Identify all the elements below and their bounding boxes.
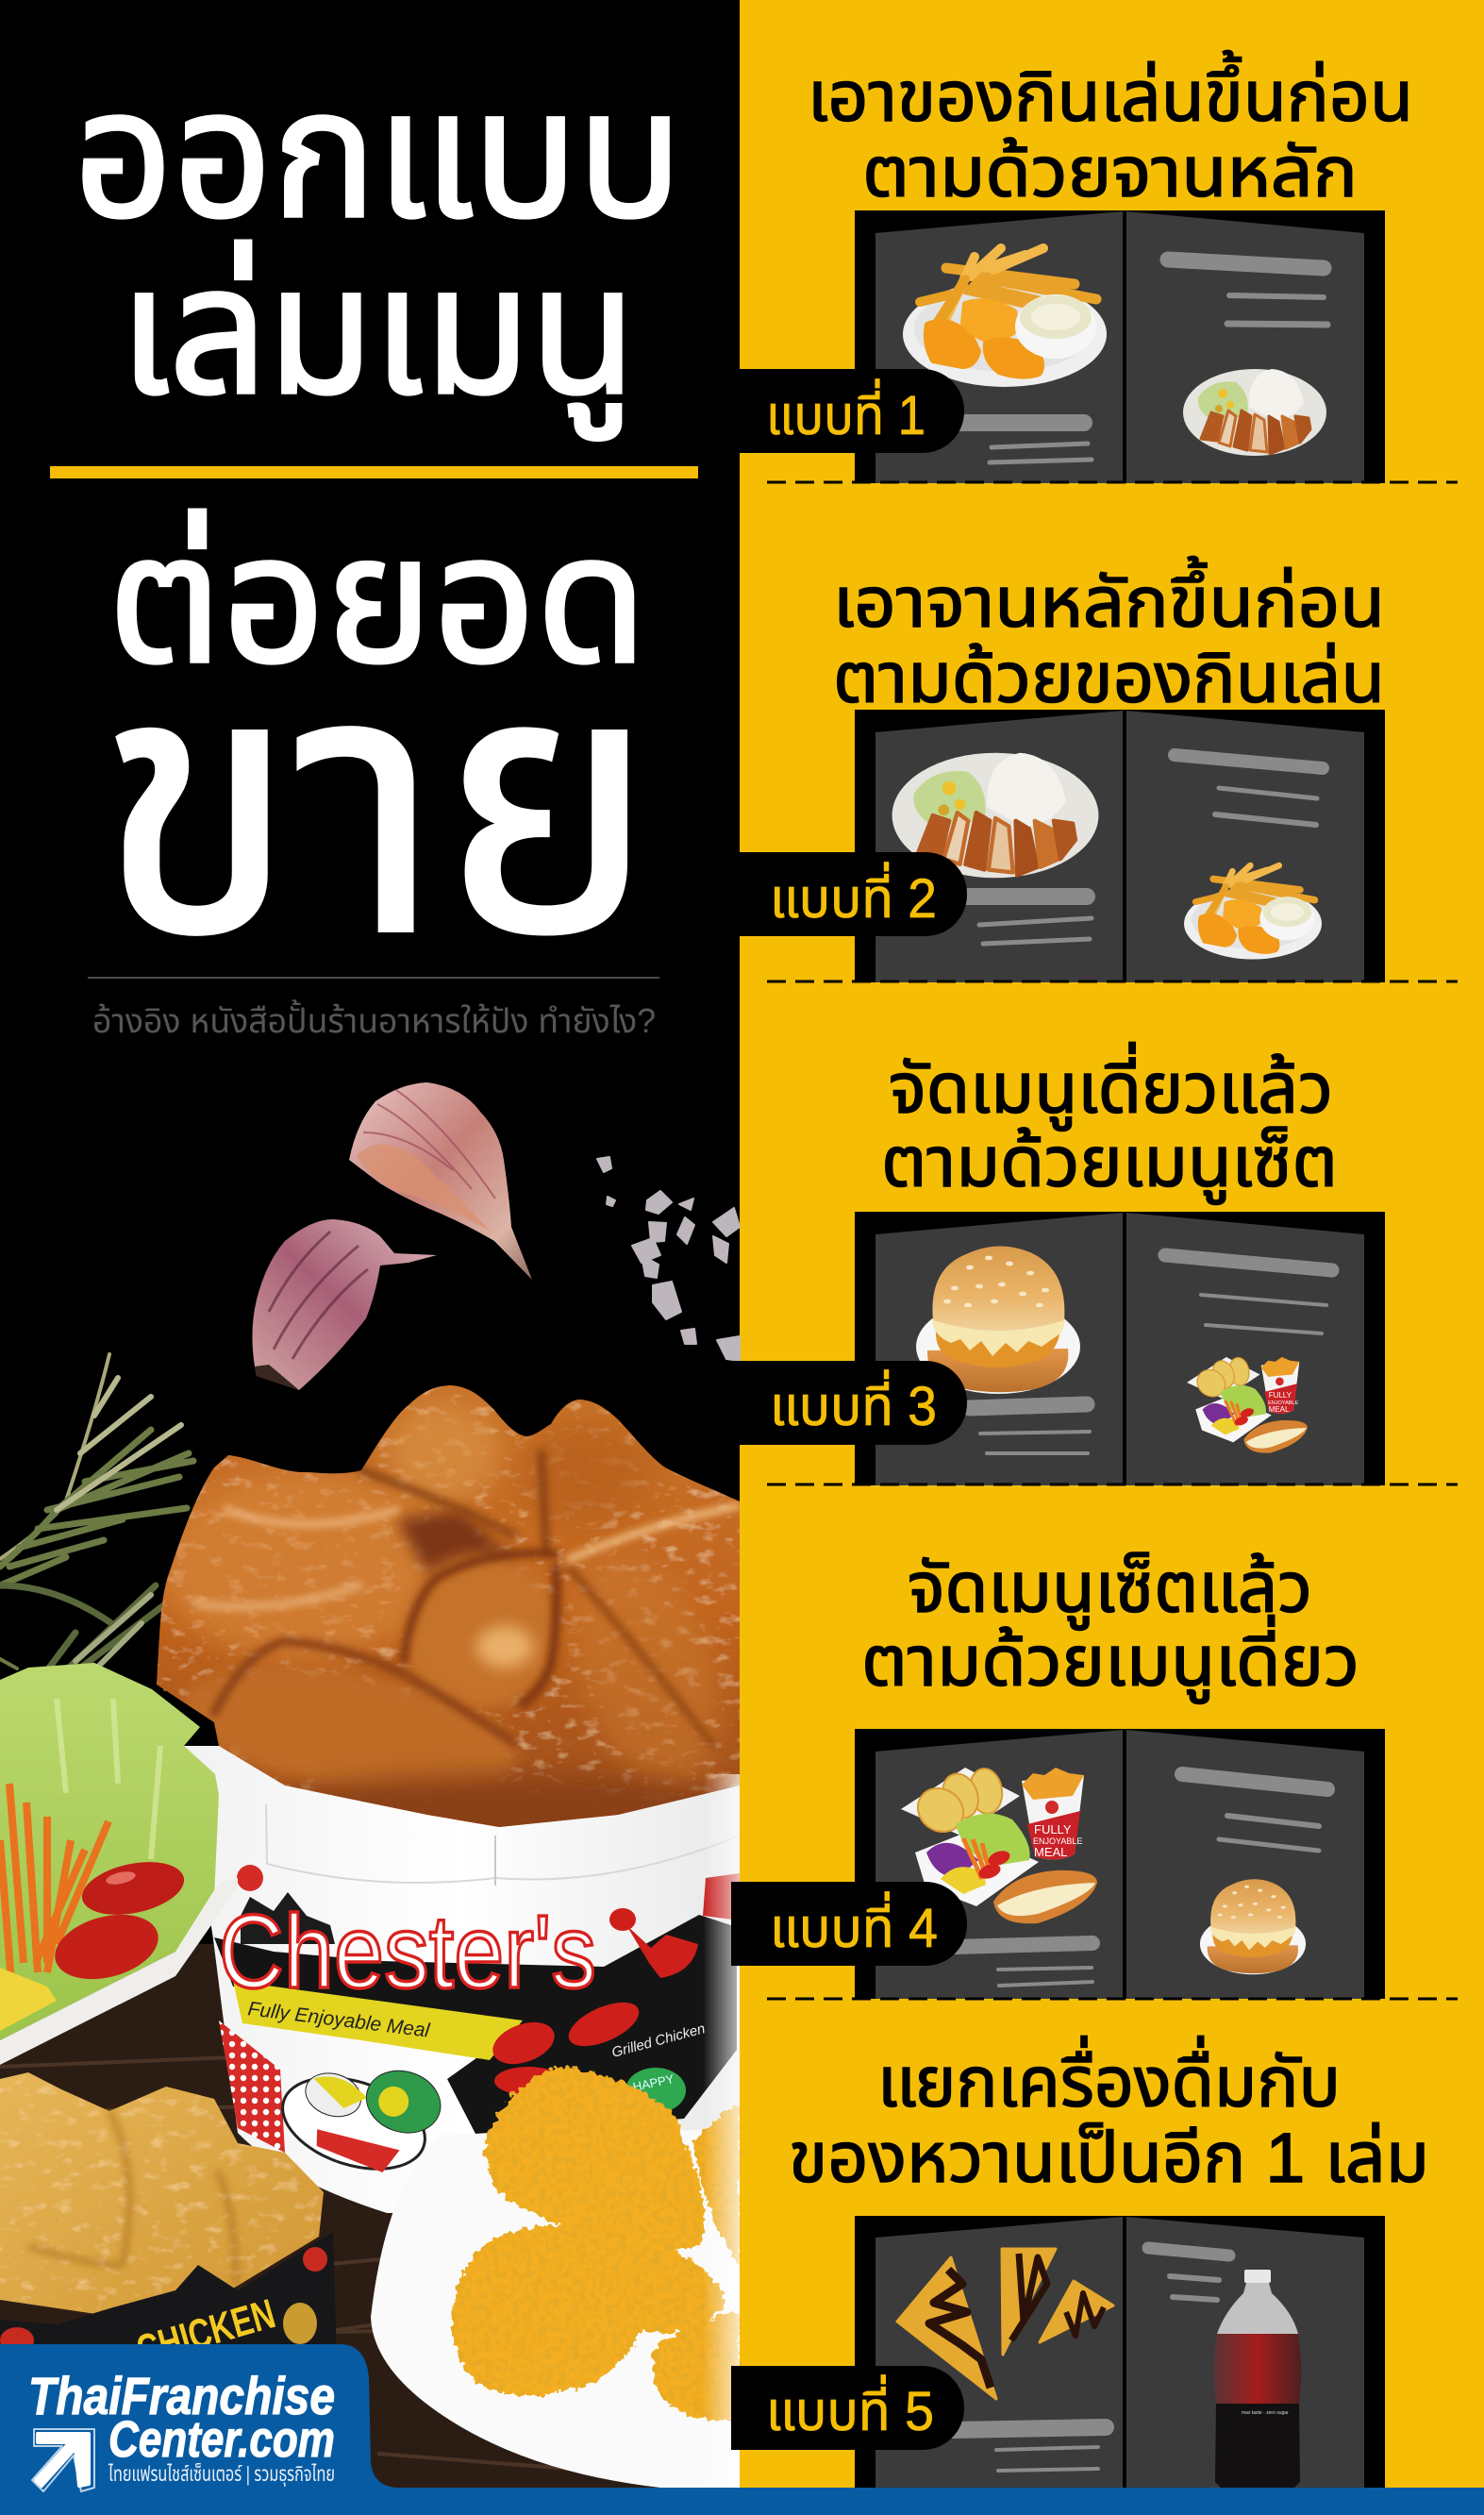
heading: layout 4: ตามด้วยเมนูเดี่ยว xyxy=(861,1615,1359,1703)
menu book: layout 3 xyxy=(855,1212,1385,1485)
dashed separator 1 xyxy=(767,481,1458,483)
heading: layout 1 xyxy=(808,50,1413,211)
menu book: layout 5 xyxy=(855,2216,1385,2488)
food: grilled chicken rice plate xyxy=(892,753,1098,878)
panel: layout 5 xyxy=(731,2036,1429,2488)
menu book: layout 1 xyxy=(855,210,1385,483)
source note: อ้างอิง หนังสือปั้นร้านอาหารให้ปัง ทำยังไง? xyxy=(92,998,656,1040)
logo wordmark second line: Center.com xyxy=(108,2411,335,2468)
panel: layout 2 xyxy=(731,556,1385,982)
food: cheese burger xyxy=(916,1246,1080,1394)
heading: layout 3 xyxy=(881,1042,1338,1204)
heading: layout 2: เอาจานหลักขึ้นก่อน xyxy=(833,556,1385,642)
heading: layout 5: แยกเครื่องดื่มกับ xyxy=(877,2036,1341,2121)
menu text placeholders xyxy=(970,1255,1332,1453)
dashed separator 2 xyxy=(767,980,1458,983)
food: set meal xyxy=(1187,1356,1308,1453)
bucket artwork: yellow ribbon xyxy=(233,1981,523,2060)
food: nuggets and fries plate xyxy=(1184,865,1322,960)
title: เล่มเมนู: เล่มเมนู xyxy=(120,231,636,440)
menu book: layout 4 xyxy=(855,1729,1385,1999)
label: layout 1: แบบที่ 1 xyxy=(766,378,925,446)
photo: black chicken box xyxy=(0,2232,337,2374)
menu text placeholders xyxy=(951,2248,1229,2471)
label: layout 3 xyxy=(731,1361,967,1445)
footer: blue strip xyxy=(0,2488,1484,2515)
food: set meal xyxy=(901,1767,1097,1923)
label: layout 4: แบบที่ 4 xyxy=(770,1891,938,1959)
food: cola bottle xyxy=(1214,2270,1301,2488)
heading: layout 4 xyxy=(861,1549,1359,1703)
label: layout 3: แบบที่ 3 xyxy=(770,1369,937,1437)
photo: rosemary sprig xyxy=(0,1354,193,1689)
bucket artwork: green balloon: HAPPY xyxy=(632,2071,675,2094)
bucket artwork: green balloon xyxy=(625,2068,686,2113)
food: cola bottle: max taste · zero sugar xyxy=(1242,2410,1289,2416)
label: layout 5: แบบที่ 5 xyxy=(766,2374,934,2442)
bucket artwork: brand name: Chester's xyxy=(219,1894,596,2010)
menu book: layout 2 xyxy=(855,710,1385,982)
photo: sea salt crystals xyxy=(597,1157,740,1361)
heading: layout 1: เอาของกินเล่นขึ้นก่อน xyxy=(808,50,1413,136)
heading: layout 2: ตามด้วยของกินเล่น xyxy=(833,639,1385,717)
bucket artwork: right accents xyxy=(703,1873,740,1920)
label: layout 5 xyxy=(731,2366,964,2450)
photo: salad tray xyxy=(0,1663,238,2065)
photo: wooden table xyxy=(0,1944,740,2501)
bucket artwork: red polka dots xyxy=(219,2020,285,2153)
bucket artwork: illustrated meal plate xyxy=(271,2037,449,2187)
panel: layout 3 xyxy=(731,1042,1385,1485)
bucket artwork: sun and skyline xyxy=(237,1865,335,1944)
bucket artwork: red drumsticks xyxy=(487,1908,698,2095)
photo: golden nuggets xyxy=(0,2072,324,2324)
heading: layout 4: จัดเมนูเซ็ตแล้ว xyxy=(908,1549,1312,1630)
bucket artwork: grilled chicken caption: Grilled Chicken xyxy=(610,2020,707,2061)
heading: layout 5 xyxy=(789,2036,1429,2197)
logo tagline: ไทยแฟรนไชส์เซ็นเตอร์ | รวมธุรกิจไทย xyxy=(108,2462,335,2487)
food: chocolate drizzled pastries xyxy=(897,2249,1113,2399)
label: layout 4 xyxy=(731,1882,967,1966)
heading: layout 1: ตามด้วยจานหลัก xyxy=(862,133,1358,211)
logo: ThaiFranchise Center.com xyxy=(0,2344,396,2491)
photo: fried chicken pieces xyxy=(452,2067,740,2422)
photo: black chicken box: CHICKEN xyxy=(131,2290,280,2374)
menu text placeholders xyxy=(960,260,1327,462)
bucket artwork: black band xyxy=(214,1915,737,2134)
heading: layout 5: ของหวานเป็นอีก 1 เล่ม xyxy=(789,2119,1429,2197)
panel: layout 4 xyxy=(731,1549,1385,1999)
panel: left food photo xyxy=(0,1082,774,2501)
photo edge fade xyxy=(703,1774,740,2491)
title: ต่อยอด: ต่อยอด xyxy=(108,500,647,700)
label: layout 2 xyxy=(731,852,967,936)
yellow divider bar xyxy=(50,466,698,478)
title: ขาย: ขาย xyxy=(98,601,655,1008)
heading: layout 2 xyxy=(833,556,1385,717)
menu text placeholders xyxy=(967,755,1323,944)
photo: white plate xyxy=(371,2129,740,2490)
photo: garlic clove upper xyxy=(349,1082,532,1280)
photo: chester's bucket xyxy=(184,1746,740,2213)
food: nuggets and fries plate xyxy=(903,248,1107,387)
heading: layout 3: จัดเมนูเดี่ยวแล้ว xyxy=(889,1042,1333,1131)
label: layout 1 xyxy=(731,369,964,453)
logo arrow icon xyxy=(32,2429,94,2491)
logo wordmark: ThaiFranchise xyxy=(28,2366,335,2425)
heading: layout 3: ตามด้วยเมนูเซ็ต xyxy=(881,1123,1338,1204)
title: ออกแบบ: ออกแบบ xyxy=(74,55,682,255)
dashed separator 4 xyxy=(767,1997,1458,2001)
menu text placeholders xyxy=(956,1774,1327,1986)
photo: garlic clove lower xyxy=(252,1219,437,1390)
dashed separator 3 xyxy=(767,1484,1458,1485)
panel: layout 1 xyxy=(731,50,1413,483)
divider line xyxy=(88,977,659,979)
bucket artwork: ribbon script: Fully Enjoyable Meal xyxy=(246,1998,432,2042)
food: cheese burger xyxy=(1200,1879,1306,1974)
label: layout 2: แบบที่ 2 xyxy=(770,862,937,930)
photo: roast chicken pieces xyxy=(157,1385,740,1827)
panel: yellow menu column xyxy=(740,0,1484,2515)
food: grilled chicken rice plate xyxy=(1183,369,1326,456)
